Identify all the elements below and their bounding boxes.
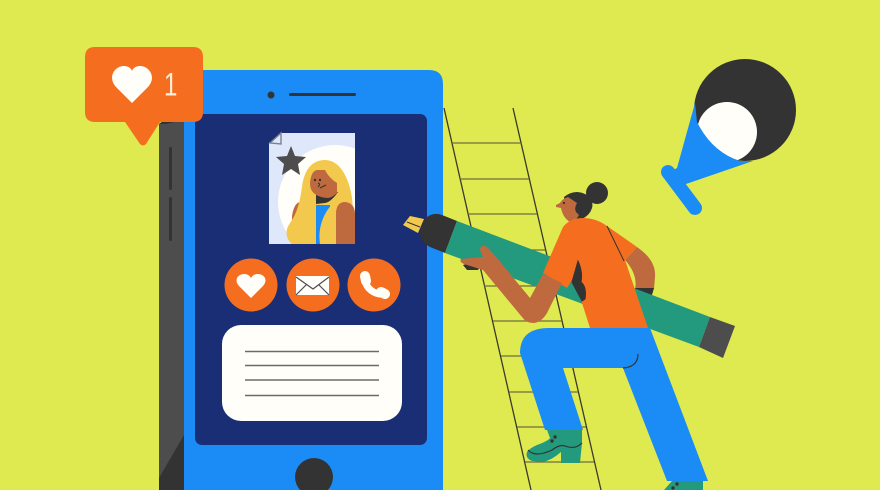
phone <box>159 70 443 490</box>
icon: heart button <box>224 258 278 312</box>
hair strand and strap <box>572 226 624 301</box>
phone screen <box>195 114 427 445</box>
ladder <box>444 108 601 490</box>
legs <box>520 328 708 481</box>
notification bubble <box>85 47 203 146</box>
infographic illustration <box>85 47 796 490</box>
far hand <box>463 264 480 270</box>
like count: 1 <box>164 66 177 102</box>
icon: heart <box>112 66 152 103</box>
phone side edge <box>159 112 190 490</box>
document corner fold <box>270 133 281 144</box>
shirt <box>543 218 648 328</box>
pencil <box>403 214 735 358</box>
home button <box>295 458 333 490</box>
icon: mail button <box>286 258 340 312</box>
front arm and hand <box>460 246 562 323</box>
speaker and camera <box>268 92 356 98</box>
right shoe <box>664 481 703 490</box>
back arm <box>625 247 655 289</box>
profile document <box>268 132 355 244</box>
icon: phone button <box>348 258 400 312</box>
phone body <box>184 70 443 490</box>
message card <box>222 325 402 421</box>
person climbing with pencil <box>403 182 735 490</box>
left shoe <box>527 430 582 463</box>
star icon <box>276 146 306 175</box>
location pin <box>668 59 796 208</box>
head <box>556 182 608 222</box>
portrait <box>278 145 355 244</box>
